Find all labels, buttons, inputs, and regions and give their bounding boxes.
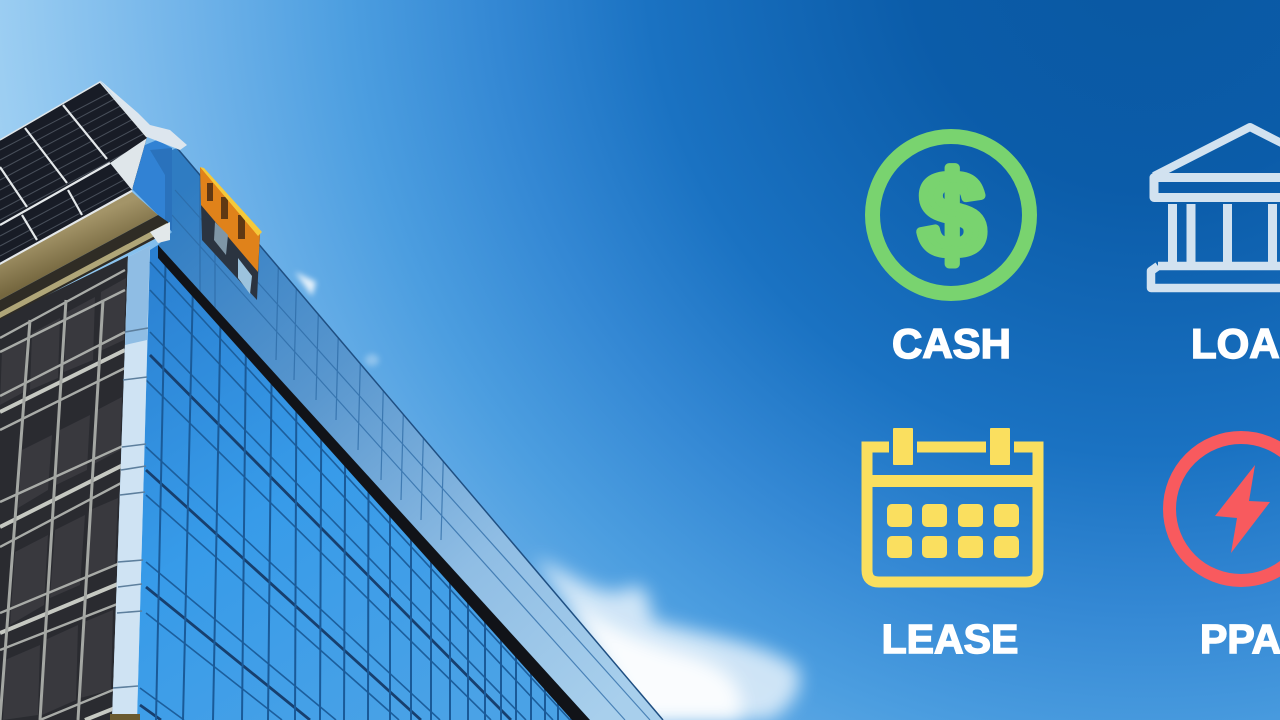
option: PPA — [1170, 438, 1280, 662]
option: cash — [872, 136, 1030, 367]
rooftop sign — [200, 167, 262, 300]
clouds — [295, 272, 800, 720]
white corner column — [110, 246, 150, 720]
label: cash: CASH — [892, 320, 1011, 367]
fascia band along roof edge — [158, 148, 663, 720]
black shadow line below fascia — [158, 245, 590, 720]
label: PPA: PPA — [1200, 616, 1280, 662]
icon: dollar coin: $ — [919, 149, 985, 281]
building — [0, 80, 663, 720]
option: loan — [1151, 127, 1280, 367]
panel underside — [0, 192, 158, 300]
dark glass side of building — [0, 256, 128, 720]
solar panel array — [0, 80, 187, 264]
option: lease — [867, 428, 1038, 662]
label: lease: LEASE — [882, 616, 1018, 662]
icon: lightning bolt in ring — [1170, 438, 1280, 580]
blue corner block — [133, 140, 172, 232]
icon: bank — [1151, 127, 1280, 288]
roof trim — [0, 215, 170, 320]
blue glass facade — [137, 245, 590, 720]
icon: dollar coin — [872, 136, 1030, 294]
icon: calendar — [867, 428, 1038, 582]
